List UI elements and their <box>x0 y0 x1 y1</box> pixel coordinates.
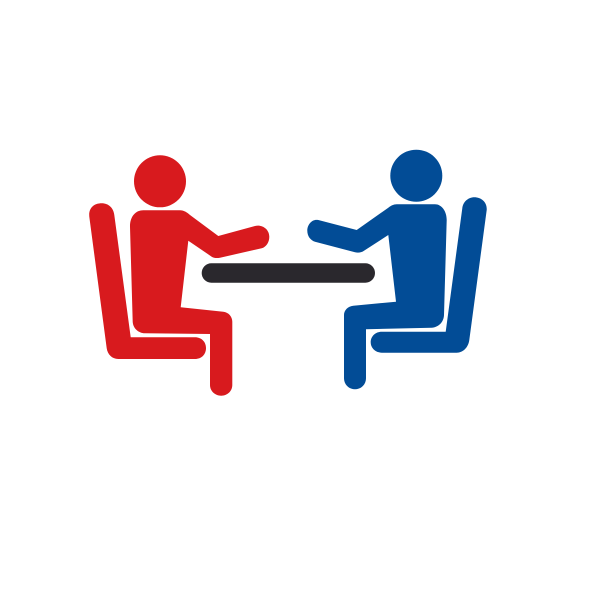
icon: red head <box>134 155 186 207</box>
icon: red body <box>130 210 269 396</box>
red person <box>89 155 269 396</box>
blue person <box>307 150 487 389</box>
icon: blue head <box>390 150 442 202</box>
icon: blue body <box>307 204 447 389</box>
icon: blue chair <box>371 197 487 353</box>
table <box>202 263 375 283</box>
icon: red chair <box>89 203 206 359</box>
